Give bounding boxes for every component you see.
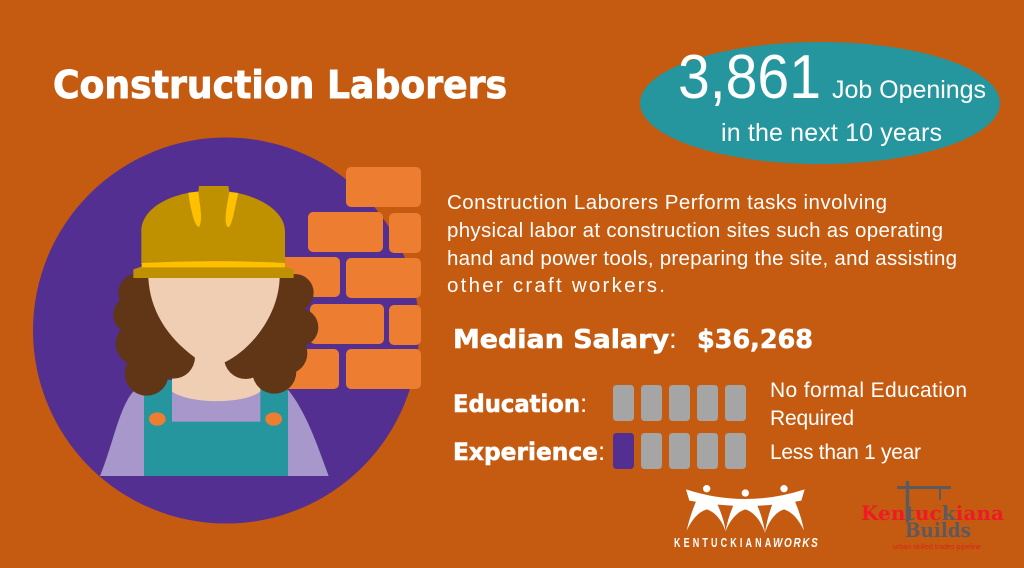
experience row: Less than 1 year bbox=[770, 441, 921, 464]
logo: Kentuckiana Builds: Kentuckiana bbox=[861, 501, 1004, 525]
logo: Kentuckiana Builds: urban skilled trades pipeline bbox=[893, 542, 981, 551]
logo: KentuckianaWorks: KENTUCKIANA bbox=[674, 537, 771, 550]
illustration: construction worker in purple circle bbox=[33, 138, 421, 524]
education row: Required bbox=[770, 407, 854, 430]
experience row: Experience bbox=[453, 438, 598, 466]
description text: other craft workers. bbox=[447, 274, 665, 297]
callout: job openings: 3,861 bbox=[678, 43, 821, 112]
icon: crane bbox=[897, 481, 951, 522]
median salary bbox=[453, 323, 813, 355]
logo: KentuckianaWorks: WORKS bbox=[773, 537, 818, 550]
median salary: $36,268 bbox=[697, 325, 813, 355]
median salary: : bbox=[669, 323, 677, 354]
icon: brick wall bbox=[270, 167, 421, 389]
education row: : bbox=[580, 388, 587, 418]
callout: job openings: in the next 10 years bbox=[721, 119, 942, 147]
description text bbox=[447, 191, 957, 297]
description text: Construction Laborers Perform tasks involving bbox=[447, 191, 887, 214]
experience level blocks bbox=[613, 433, 746, 469]
logo: Kentuckiana Builds: Builds bbox=[905, 518, 971, 542]
experience row: : bbox=[598, 436, 605, 466]
experience row bbox=[453, 433, 921, 469]
callout: job openings: Job Openings bbox=[832, 76, 986, 104]
callout: job openings bbox=[640, 42, 1000, 164]
median salary: Median Salary bbox=[453, 325, 669, 355]
logo: KentuckianaWorks bbox=[674, 485, 818, 550]
education level blocks bbox=[613, 385, 746, 421]
education row: No formal Education bbox=[770, 379, 967, 402]
title: Construction Laborers bbox=[53, 63, 507, 107]
description text: physical labor at construction sites such as operating bbox=[447, 219, 943, 242]
icon: worker bbox=[100, 186, 329, 476]
education row: Education bbox=[453, 390, 580, 418]
description text: hand and power tools, preparing the site, and assisting bbox=[447, 247, 957, 270]
education row bbox=[453, 379, 967, 430]
logo: Kentuckiana Builds bbox=[861, 481, 1004, 551]
